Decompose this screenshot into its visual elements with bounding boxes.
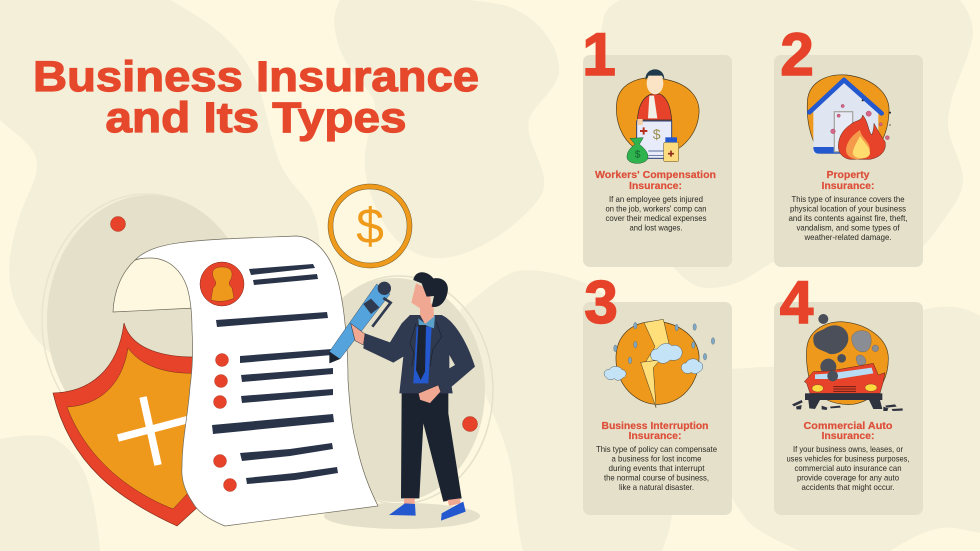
- jacket: [363, 315, 475, 393]
- avatar badge: [200, 262, 244, 306]
- shirt and tie: [413, 327, 432, 383]
- icon: injured worker: $: [635, 150, 641, 161]
- heading: [595, 169, 716, 192]
- icon: shield: [53, 323, 200, 526]
- description: physical location of your business: [790, 204, 906, 214]
- icon: injured worker: $: [653, 126, 661, 142]
- heading: Insurance:: [629, 180, 682, 192]
- description: This type of policy can compensate: [596, 444, 717, 454]
- description: uses vehicles for business purposes,: [786, 454, 910, 464]
- description: [788, 194, 908, 242]
- heading: [602, 420, 708, 442]
- icon: dollar coin: $: [356, 198, 384, 254]
- hands: [418, 385, 441, 403]
- description: provide coverage for any auto: [797, 472, 899, 482]
- panel: business interruption: [583, 269, 732, 515]
- heading: Insurance:: [628, 430, 682, 442]
- heading: Workers' Compensation: [595, 169, 716, 181]
- description: a business for lost income: [612, 454, 702, 464]
- icon: crashed car: [792, 314, 903, 411]
- bullet dots: [214, 354, 236, 492]
- icon: storm: [604, 319, 715, 408]
- neck and face: [420, 303, 434, 324]
- description: like a natural disaster.: [619, 482, 694, 492]
- icon: house on fire: [807, 75, 891, 159]
- title: [33, 53, 479, 142]
- illustration: insurance policy with businessman: [42, 186, 493, 529]
- number 2: 2: [780, 21, 814, 88]
- panel: commercial auto: [774, 269, 923, 515]
- businessman with pen: [329, 272, 475, 521]
- description: on the job, workers' comp can: [606, 204, 707, 214]
- heading: Insurance:: [822, 430, 874, 442]
- number 4: 4: [780, 269, 814, 336]
- policy text lines: [212, 264, 338, 484]
- description: weather-related damage.: [804, 232, 892, 242]
- number 1: 1: [582, 21, 616, 88]
- panel: property insurance: [774, 21, 923, 267]
- icon: dollar coin: [330, 186, 410, 266]
- heading: Commercial Auto: [804, 420, 892, 432]
- description: the normal course of business,: [604, 472, 709, 482]
- description: If your business owns, leases, or: [793, 444, 903, 454]
- icon: injured worker: [616, 69, 699, 163]
- description: accidents that might occur.: [802, 482, 894, 492]
- paper curl: [113, 256, 195, 312]
- description: [786, 444, 910, 492]
- red dot top left: [110, 216, 126, 232]
- pants: [401, 392, 462, 502]
- shoes: [389, 502, 466, 521]
- description: [596, 444, 717, 492]
- title: Business Insurance: [33, 53, 479, 101]
- red dot right: [462, 416, 478, 432]
- description: commercial auto insurance can: [794, 463, 902, 473]
- heading: [804, 420, 892, 442]
- description: If an employee gets injured: [609, 194, 703, 204]
- description: cover their medical expenses: [606, 213, 706, 223]
- heading: Insurance:: [822, 180, 874, 192]
- hair: [413, 272, 448, 307]
- paper document: [135, 236, 378, 526]
- number 3: 3: [584, 269, 618, 336]
- description: during events that interrupt: [608, 463, 705, 473]
- heading: [822, 169, 874, 192]
- heading: Property: [826, 169, 870, 181]
- title: and Its Types: [106, 94, 406, 142]
- description: [606, 194, 707, 232]
- description: and lost wages.: [630, 222, 682, 232]
- heading: Business Interruption: [602, 420, 708, 432]
- description: This type of insurance covers the: [792, 194, 905, 204]
- panel: workers' compensation: [582, 21, 732, 267]
- pen: [329, 284, 390, 359]
- description: vandalism, and some types of: [796, 222, 900, 232]
- description: and its contents against fire, theft,: [788, 213, 908, 223]
